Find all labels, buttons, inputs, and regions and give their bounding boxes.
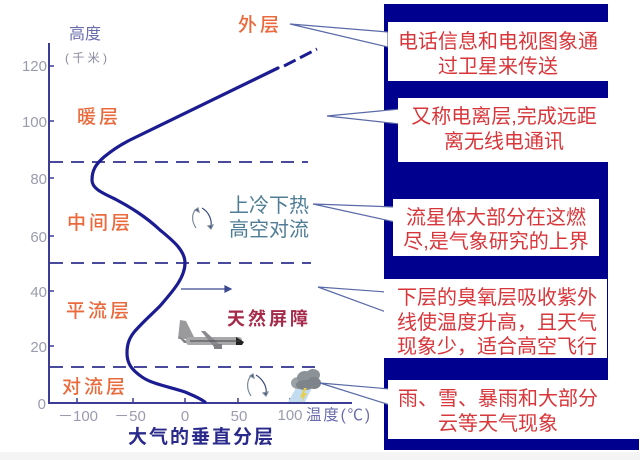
y axis numbers [22,58,47,413]
callout 3: meteors [313,199,599,256]
note: convection: 上冷下热 [229,194,309,217]
x axis numbers: 0 [181,408,189,425]
x axis numbers: －50 [114,408,146,425]
bottom page strip [0,452,640,460]
label: thermosphere: 暖层 [77,106,121,128]
panel: blue backing [384,4,639,450]
axis title: altitude: (千米) [65,51,107,65]
callout 1: satellites [290,22,608,81]
label: mesosphere: 中间层 [67,212,133,234]
label: exosphere: 外层 [238,14,282,36]
callout 4: ozone: 现象少，适合高空飞行 [397,335,597,358]
curve dashed tail [284,49,317,66]
note: convection: 高空对流 [229,218,309,241]
x axis numbers: 100 [277,407,303,424]
axis title: altitude: 高度 [69,25,101,43]
callout 5: weather: 雨、雪、暴雨和大部分 [398,387,598,410]
x axis numbers: 50 [231,408,247,425]
y axis numbers: 60 [30,229,47,246]
callout 1: satellites: 电话信息和电视图象通 [398,30,598,53]
label: troposphere: 对流层 [62,376,128,398]
y axis numbers: 120 [22,58,47,75]
x axis numbers [58,407,303,425]
callout 3: meteors: 流星体大部分在这燃 [406,206,586,229]
arrow: stratosphere flow [181,286,231,292]
icon: storm cloud [288,369,321,403]
callout 2: ionosphere: 离无线电通讯 [444,130,564,153]
callout 5: weather: 云等天气现象 [438,412,558,435]
callout 4: ozone: 下层的臭氧层吸收紫外 [397,286,597,309]
y axis numbers: 100 [22,114,47,131]
axis title: temperature: 温度(℃) [306,406,370,424]
callout 3: meteors: 尽,是气象研究的上界 [403,230,589,253]
temperature curve [92,68,278,402]
callout 1: satellites: 过卫星来传送 [438,55,558,78]
note: convection [229,194,309,241]
label: natural barrier: 天然屏障 [227,308,311,329]
axes [49,43,352,403]
callout 4: ozone [318,279,607,358]
callout 2: ionosphere: 又称电离层,完成远距 [411,105,597,128]
icon: lower convection arrows [248,374,268,396]
y axis numbers: 0 [38,396,46,413]
axis title: altitude [65,25,107,65]
icon: airplane [178,320,244,349]
x axis numbers: －100 [58,408,98,425]
y axis numbers: 40 [30,284,47,301]
icon: upper convection arrows [193,208,213,229]
callout 5: weather [320,380,640,439]
chart: vertical atmosphere profile [22,25,370,448]
y axis numbers: 80 [30,171,47,188]
chart title: 大气的垂直分层 [128,426,275,448]
callout 2: ionosphere [327,98,608,162]
callout 4: ozone: 线使温度升高，且天气 [397,311,597,334]
label: stratosphere: 平流层 [66,300,132,322]
y axis numbers: 20 [30,339,47,356]
layer boundaries [50,162,320,367]
